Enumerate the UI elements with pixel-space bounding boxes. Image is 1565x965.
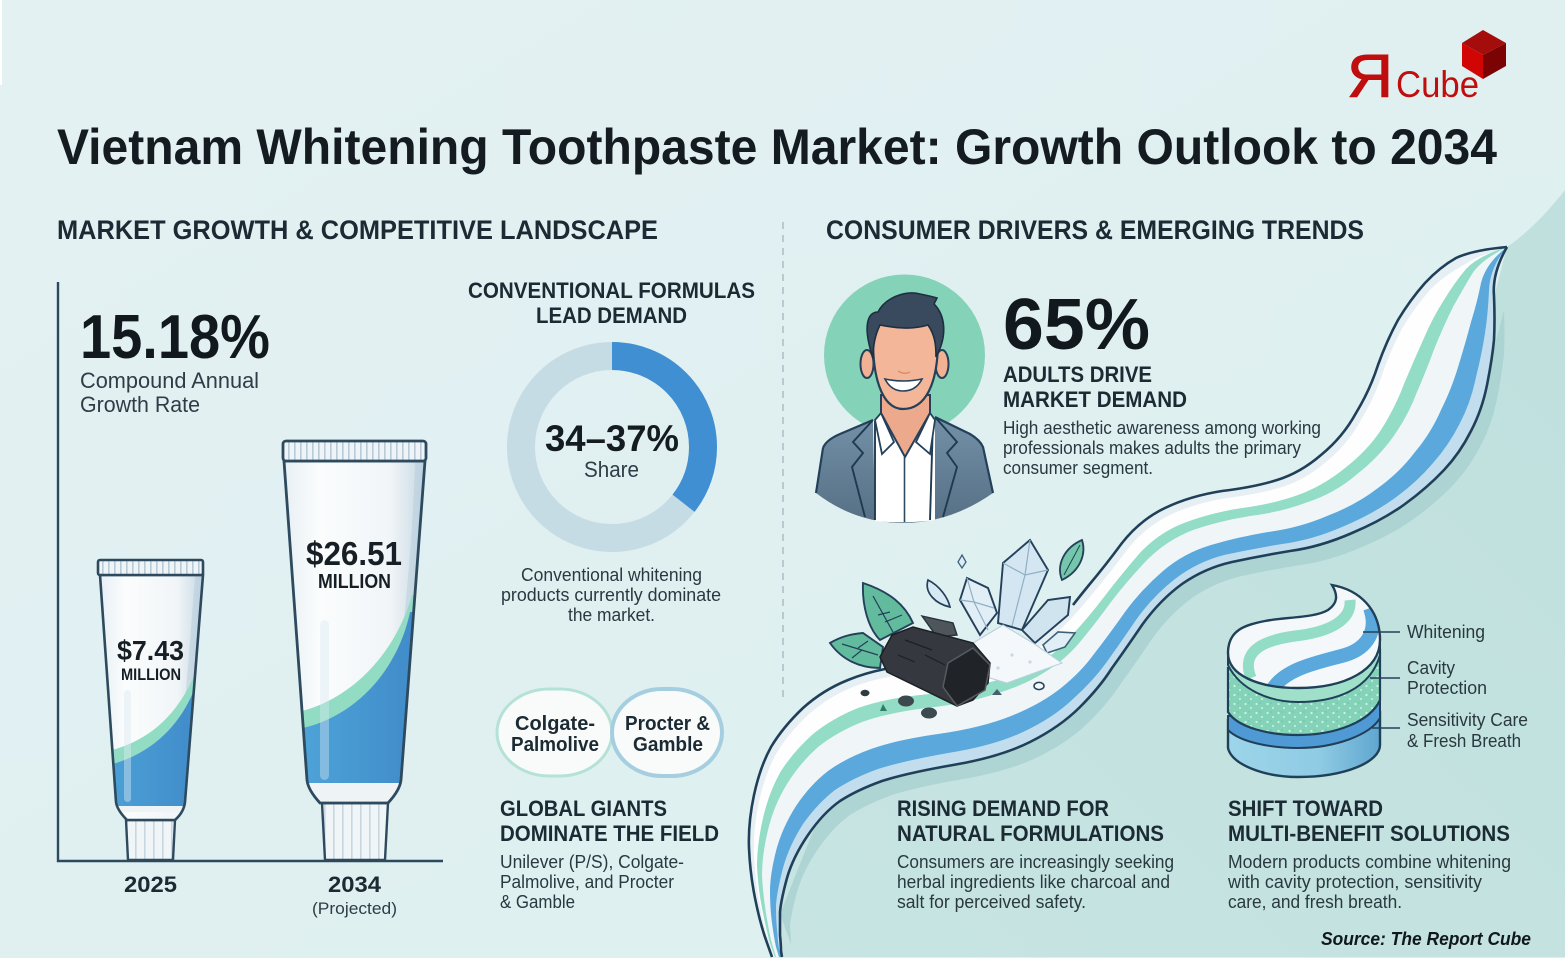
tube: 2025: $7.43	[117, 635, 184, 666]
axis label: 2034 projected: (Projected)	[312, 899, 397, 918]
axis label: 2025: 2025	[124, 872, 177, 897]
leader lines and labels: Whitening	[1407, 622, 1485, 642]
panel: adults drive demand	[816, 274, 1321, 523]
text: rising demand: NATURAL FORMULATIONS	[897, 821, 1164, 846]
text: global giants: Palmolive, and Procter	[500, 872, 674, 892]
badge: Procter and Gamble: Gamble	[633, 734, 703, 756]
stat: CAGR: Growth Rate	[80, 392, 200, 417]
donut caption	[501, 565, 721, 625]
text: rising demand: RISING DEMAND FOR	[897, 796, 1109, 821]
text: multi-benefit solutions	[1227, 796, 1511, 912]
stat: CAGR: 15.18%	[80, 303, 270, 372]
text: global giants: GLOBAL GIANTS	[500, 796, 667, 821]
text: multi-benefit solutions: care, and fresh breath.	[1228, 892, 1402, 912]
title: Vietnam Whitening Toothpaste Market: Growth Outlook to 2034	[57, 119, 1497, 175]
heading: market growth: MARKET GROWTH & COMPETITIVE LANDSCAPE	[57, 215, 658, 245]
icon: layered toothpaste jar	[1228, 585, 1528, 777]
badge: Colgate-Palmolive	[497, 689, 612, 776]
heading: conventional formulas	[468, 278, 755, 328]
tube: 2034: MILLION	[318, 571, 391, 593]
donut caption: the market.	[568, 605, 655, 625]
tube: 2034: $26.51	[306, 535, 402, 572]
heading: conventional formulas: CONVENTIONAL FORMULAS	[468, 278, 755, 303]
icon: charcoal salt crystals leaves	[830, 540, 1083, 718]
text: global giants: DOMINATE THE FIELD	[500, 821, 719, 846]
text: rising demand: Consumers are increasingly seeking	[897, 852, 1174, 872]
text: adults drive market demand: ADULTS DRIVE	[1003, 362, 1152, 387]
text: adults drive market demand: professionals makes adults the primary	[1003, 438, 1301, 458]
text: multi-benefit solutions: with cavity protection, sensitivity	[1227, 872, 1482, 892]
tube: 2025	[95, 560, 210, 860]
text: adults drive market demand	[1003, 362, 1321, 478]
panel: market growth chart	[58, 282, 443, 918]
logo: RCube: Я	[1347, 43, 1393, 110]
leader lines and labels: & Fresh Breath	[1407, 731, 1521, 751]
text: global giants: Unilever (P/S), Colgate-	[500, 852, 684, 872]
text: rising demand	[897, 796, 1174, 912]
text: global giants	[500, 796, 719, 912]
donut chart: 34–37%	[545, 418, 679, 459]
panel: conventional formulas	[468, 278, 755, 912]
axis label: 2034 projected: 2034	[328, 872, 382, 897]
donut chart	[521, 356, 703, 538]
stat: CAGR	[80, 303, 270, 417]
axis label: 2034 projected	[312, 872, 397, 918]
toothpaste ribbon swoosh	[745, 247, 1565, 957]
badge: Procter and Gamble	[612, 689, 722, 776]
text: multi-benefit solutions: MULTI-BENEFIT SOLUTIONS	[1228, 821, 1510, 846]
donut caption: products currently dominate	[501, 585, 721, 605]
text: rising demand: salt for perceived safety.	[897, 892, 1086, 912]
badge: Colgate-Palmolive: Palmolive	[511, 734, 599, 756]
text: multi-benefit solutions: SHIFT TOWARD	[1228, 796, 1383, 821]
tube: 2034	[283, 441, 430, 860]
panel: multi-benefit	[1227, 585, 1528, 912]
text: multi-benefit solutions: Modern products combine whitening	[1228, 852, 1511, 872]
leader lines and labels: Cavity	[1407, 658, 1455, 678]
badge: Colgate-Palmolive: Colgate-	[515, 713, 595, 735]
donut chart: Share	[584, 457, 639, 482]
chart axes	[58, 282, 443, 861]
panel: natural formulations	[830, 540, 1174, 912]
badge: Procter and Gamble: Procter &	[625, 713, 710, 735]
text: global giants: & Gamble	[500, 892, 575, 912]
source note: Source: The Report Cube	[1321, 929, 1531, 949]
logo: RCube: Cube	[1396, 64, 1479, 105]
heading: consumer drivers: CONSUMER DRIVERS & EMERGING TRENDS	[826, 215, 1364, 245]
text: rising demand: herbal ingredients like charcoal and	[897, 872, 1170, 892]
logo: RCube	[1347, 30, 1506, 110]
stat: CAGR: Compound Annual	[80, 368, 259, 393]
heading: conventional formulas: LEAD DEMAND	[536, 303, 687, 328]
text: adults drive market demand: MARKET DEMAND	[1003, 387, 1187, 412]
stat: 65 percent: 65%	[1003, 285, 1150, 365]
text: adults drive market demand: High aesthetic awareness among working	[1003, 418, 1321, 438]
text: adults drive market demand: consumer segment.	[1003, 458, 1153, 478]
leader lines and labels: Protection	[1407, 678, 1487, 698]
icon: smiling professional	[816, 274, 993, 523]
donut caption: Conventional whitening	[521, 565, 702, 585]
tube: 2025: MILLION	[121, 665, 181, 684]
leader lines and labels	[1363, 622, 1528, 751]
leader lines and labels: Sensitivity Care	[1407, 710, 1528, 730]
